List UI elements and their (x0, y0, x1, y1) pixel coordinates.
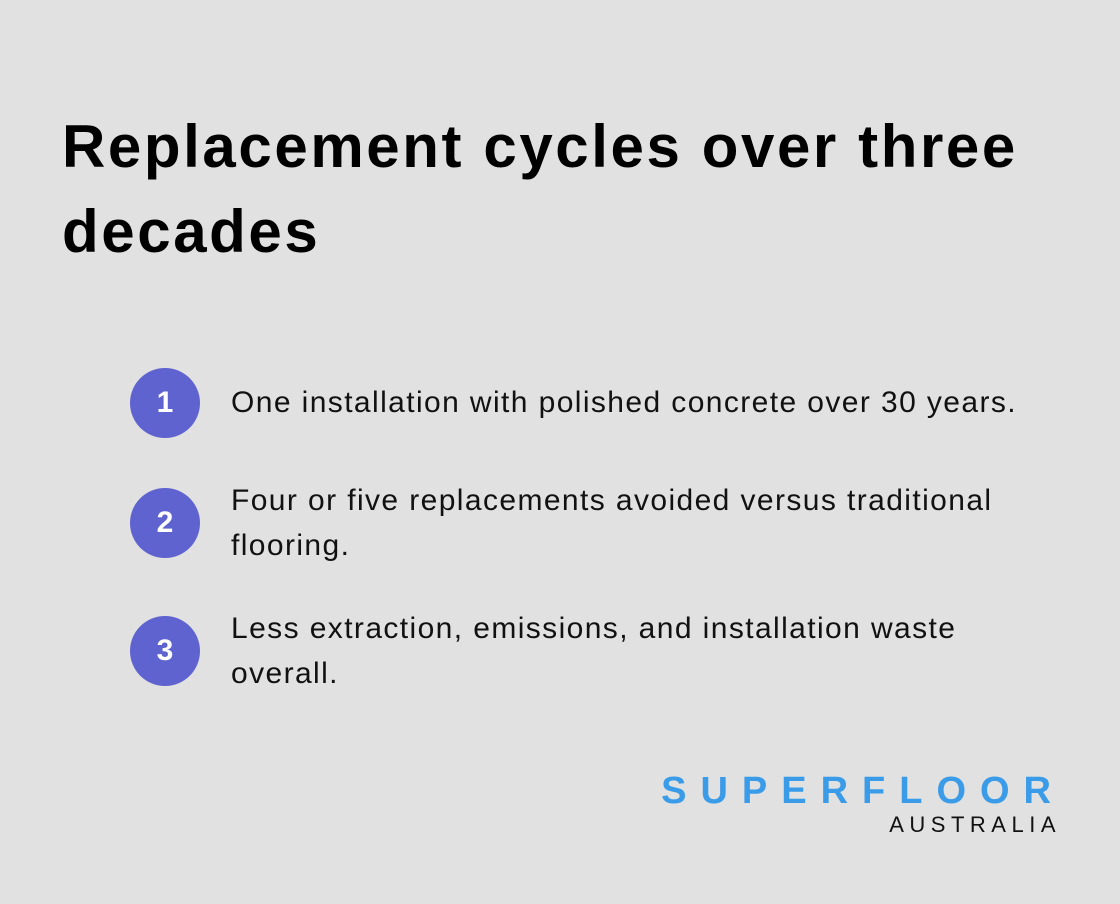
item 1 (130, 368, 1017, 438)
badge 2: 2 (157, 506, 173, 539)
logo: SUPERFLOOR (661, 770, 1065, 812)
badge 1: 1 (157, 386, 173, 419)
logo (661, 770, 1065, 837)
text 3: Less extraction, emissions, and installation waste overall. (231, 612, 956, 690)
title: Replacement cycles over three decades (62, 113, 1018, 265)
badge 1 (130, 368, 200, 438)
logo: AUSTRALIA (889, 812, 1061, 837)
badge 2 (130, 488, 200, 558)
item 3 (130, 612, 956, 690)
item 2 (130, 484, 992, 562)
text 2: Four or five replacements avoided versus traditional flooring. (231, 484, 992, 562)
badge 3: 3 (157, 634, 173, 667)
badge 3 (130, 616, 200, 686)
text 1: One installation with polished concrete over 30 years. (231, 386, 1017, 419)
